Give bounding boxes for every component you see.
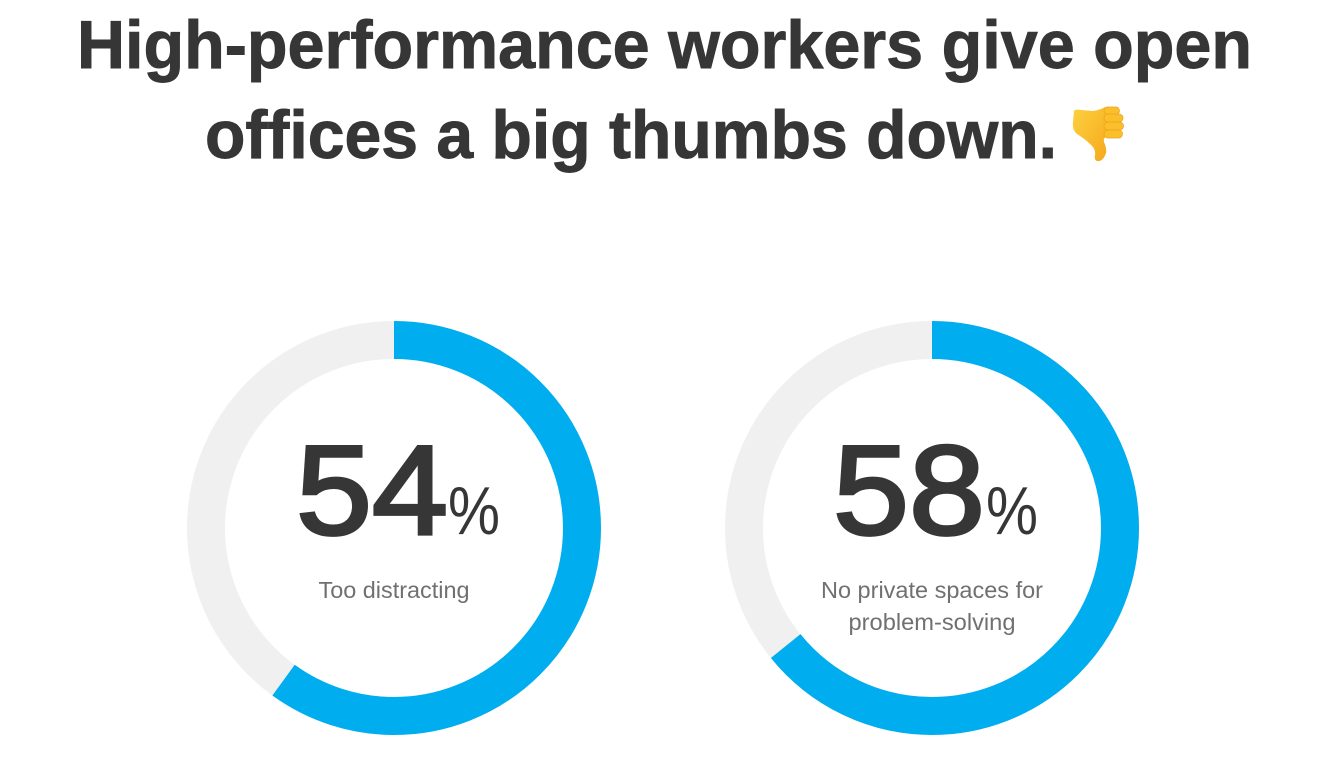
title — [77, 7, 1252, 173]
icon: thumbs down emoji — [1073, 107, 1124, 161]
label: no private spaces for problem-solving: No private spaces for — [821, 577, 1043, 603]
label: too distracting: Too distracting — [318, 577, 470, 603]
value: 54% — [296, 419, 500, 561]
value: 58%: 58 — [833, 419, 985, 561]
donut chart: 58% no private spaces — [744, 340, 1120, 716]
title: offices a big thumbs down. — [205, 97, 1057, 173]
value: 58% — [833, 419, 1038, 561]
label: no private spaces for problem-solving: problem-solving — [848, 609, 1016, 635]
value: 54%: % — [448, 473, 500, 549]
value: 58%: % — [986, 473, 1038, 549]
title: High-performance workers give open — [77, 7, 1252, 83]
label: no private spaces for problem-solving — [821, 577, 1043, 635]
value: 54%: 54 — [296, 419, 448, 561]
donut chart: 54% too distracting — [206, 340, 582, 716]
